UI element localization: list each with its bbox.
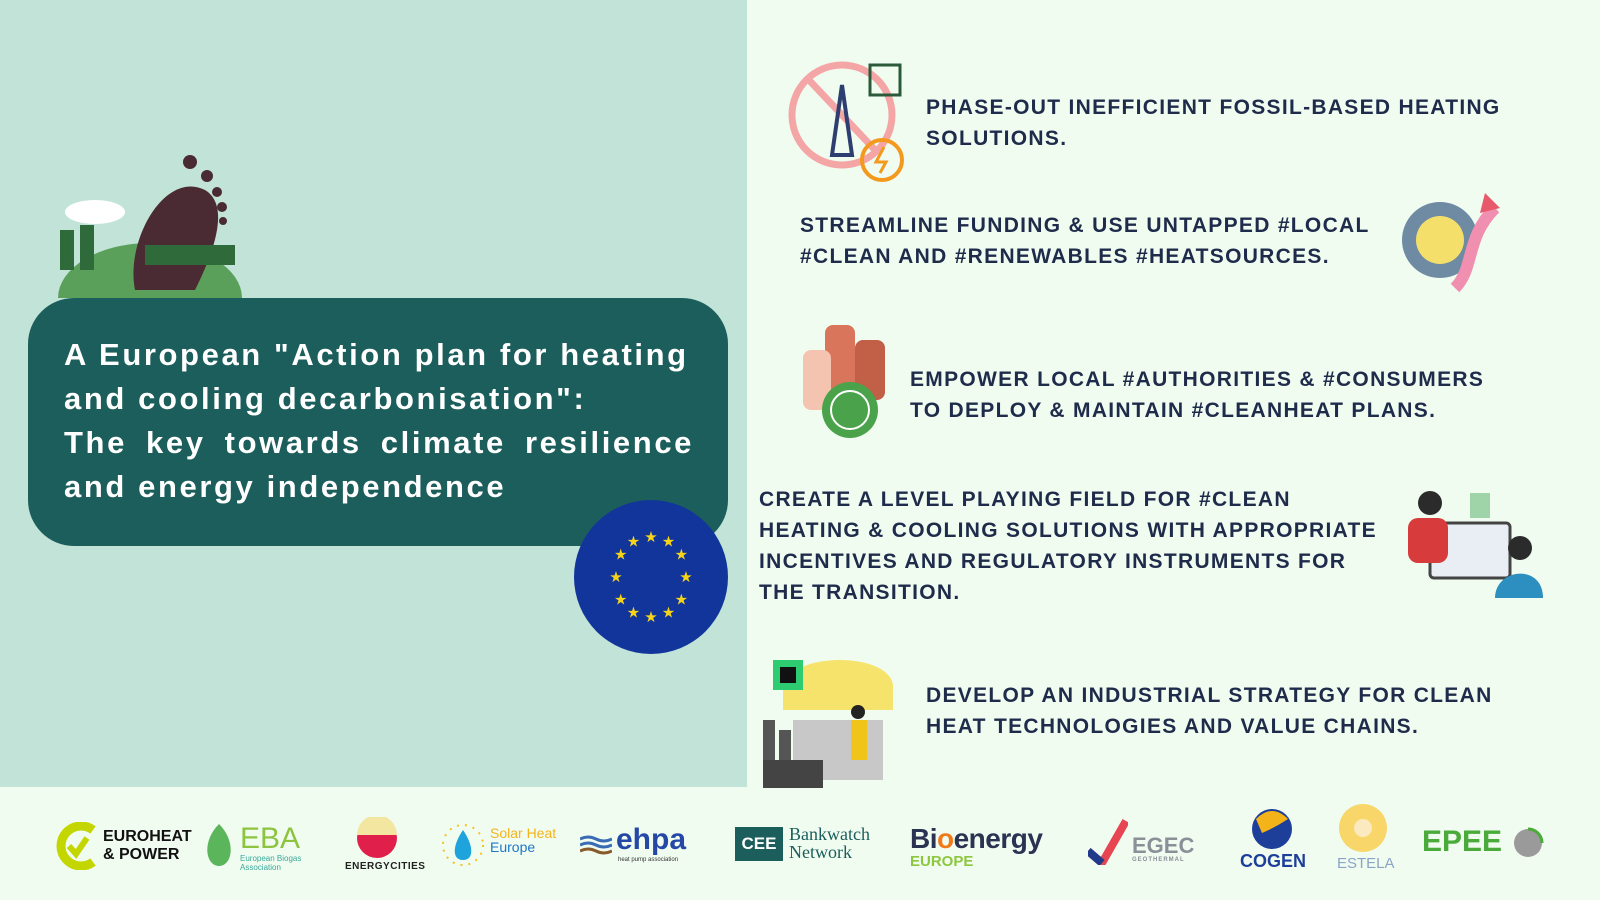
logo: EBA: EBA (240, 822, 300, 855)
item 5: DEVELOP AN INDUSTRIAL STRATEGY FOR CLEAN HEAT TECHNOLOGIES AND VALUE CHAINS. (926, 684, 1493, 738)
icon: no fossil (788, 62, 904, 182)
logo: ehpa: heat pump association (618, 857, 678, 863)
icon: EU flag circle: ★ (675, 590, 688, 608)
logo: EGEC (1088, 819, 1194, 865)
logo: CEE bankwatch: Network (789, 842, 852, 862)
icon: EU flag circle: ★ (614, 590, 627, 608)
icon: raised fists (803, 325, 885, 438)
item 4: CREATE A LEVEL PLAYING FIELD FOR #CLEAN HEATING & COOLING SOLUTIONS WITH APPROPRIATE INCENTIVES AND REGULATORY INSTRUMENTS FOR THE TRANSITION. (759, 488, 1377, 604)
logo: euroheat (56, 822, 192, 870)
logo: COGEN: COGEN (1240, 851, 1306, 871)
icon: EU flag circle: ★ (679, 568, 693, 586)
logo: euroheat: & POWER (103, 846, 179, 863)
title text: and energy independence (64, 469, 506, 504)
logo: solar heat europe (442, 824, 556, 866)
icon: EU flag circle: ★ (609, 568, 623, 586)
icon: people at screen (1408, 491, 1543, 598)
icon: EU flag circle: ★ (644, 528, 658, 546)
logo: energy cities (345, 817, 425, 872)
icon: EU flag circle: ★ (627, 603, 640, 621)
logo: bioenergy europe: EUROPE (910, 853, 973, 870)
left panel background (0, 0, 747, 787)
icon: EU flag circle: ★ (644, 608, 658, 626)
logo: solar heat europe: Solar Heat (490, 825, 556, 841)
title text: The key towards climate resilience (64, 425, 694, 460)
logo: ehpa: ehpa (616, 823, 686, 856)
item 1: PHASE-OUT INEFFICIENT FOSSIL-BASED HEATING SOLUTIONS. (926, 96, 1501, 150)
logo: EBA: European Biogas (240, 854, 301, 863)
icon: EU flag circle: ★ (627, 533, 640, 551)
logo: EPEE (1422, 825, 1544, 858)
logo: solar heat europe: Europe (490, 839, 535, 855)
icon: EU flag circle: ★ (675, 546, 688, 564)
icon: industry chip (763, 660, 894, 788)
logo: CEE bankwatch: CEE (742, 834, 776, 853)
title box (28, 298, 728, 546)
title text: A European "Action plan for heating and cooling decarbonisation": (64, 337, 689, 416)
icon: circular economy (1402, 193, 1500, 292)
title text (64, 337, 694, 504)
logo: energy cities: ENERGYCITIES (345, 861, 425, 872)
logo: ESTELA (1337, 804, 1395, 872)
logo: EGEC: EGEC (1132, 833, 1194, 858)
logo: ESTELA: ESTELA (1337, 855, 1395, 872)
icon: EU flag circle: ★ (614, 546, 627, 564)
logo: bioenergy europe (910, 823, 1043, 870)
logo: bioenergy europe: Bioenergy (910, 823, 1042, 854)
icon: EU flag circle: ★ (662, 533, 675, 551)
logo: ehpa (580, 823, 686, 863)
icon: EU flag circle (574, 500, 728, 654)
logo: euroheat: EUROHEAT (103, 828, 192, 845)
logo: EPEE: EPEE (1422, 825, 1502, 858)
icon: footprint on globe (58, 155, 242, 298)
logos strip (56, 804, 1544, 872)
logo: COGEN (1240, 809, 1306, 871)
icon: EU flag circle: ★ (662, 603, 675, 621)
logo: CEE bankwatch: Bankwatch (789, 824, 870, 844)
logo: EGEC: GEOTHERMAL (1132, 857, 1185, 863)
item 2: STREAMLINE FUNDING & USE UNTAPPED #LOCAL #CLEAN AND #RENEWABLES #HEATSOURCES. (800, 214, 1369, 268)
logo: EBA: Association (240, 863, 281, 872)
item 3: EMPOWER LOCAL #AUTHORITIES & #CONSUMERS TO DEPLOY & MAINTAIN #CLEANHEAT PLANS. (910, 368, 1484, 422)
logo: EBA (207, 822, 302, 872)
logo: CEE bankwatch (735, 824, 870, 862)
